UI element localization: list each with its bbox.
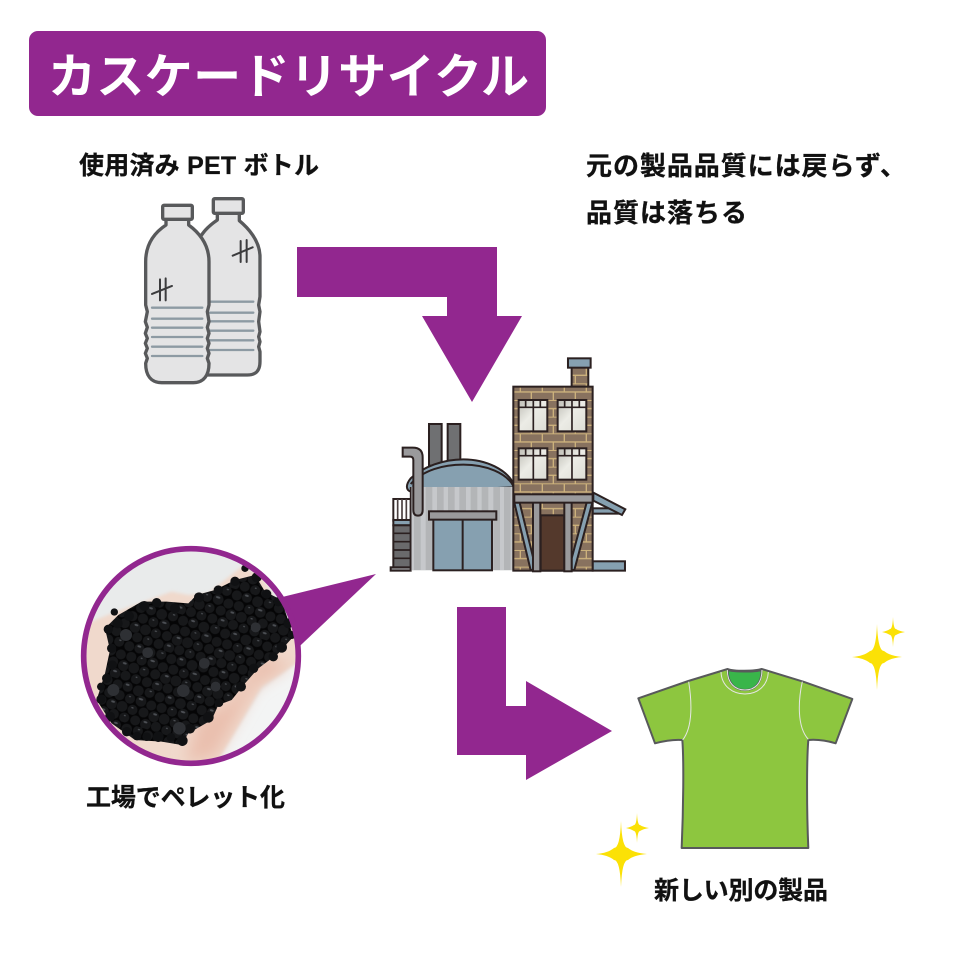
- collar inner: [728, 670, 762, 690]
- arrow: factory to new product: [457, 607, 612, 780]
- note: quality drops: 元の製品品質には戻らず、: [586, 151, 906, 181]
- brick building: [513, 387, 593, 571]
- icon: green T-shirt: [638, 669, 852, 848]
- shirt body: [638, 669, 852, 848]
- label: used PET bottles: 使用済み PET ボトル: [79, 152, 319, 180]
- icon: sparkle top: [852, 617, 905, 690]
- chimney: [568, 358, 591, 387]
- side canopy: [593, 493, 625, 571]
- title: カスケードリサイクル: [48, 51, 529, 104]
- note: quality drops: 品質は落ちる: [586, 198, 747, 228]
- icon: sparkle bottom: [596, 813, 649, 887]
- smokestacks: [429, 424, 460, 466]
- photo border: [84, 549, 298, 763]
- label: pelletized at factory: 工場でペレット化: [86, 784, 285, 812]
- icon: back bottle: [198, 199, 260, 375]
- highlighted pellets: [107, 622, 261, 735]
- windows: [519, 400, 586, 480]
- photo content: [86, 552, 296, 760]
- title: [29, 31, 546, 116]
- blob edge pellets: [96, 565, 296, 746]
- stairs: [391, 499, 411, 571]
- photo: recycled pellets: [80, 546, 302, 766]
- pipe: [403, 448, 423, 516]
- note: quality drops: [586, 151, 906, 228]
- icon: recycling factory: [391, 358, 625, 571]
- shirt seams: [683, 670, 808, 740]
- arrow: bottles to factory: [297, 247, 522, 402]
- label: new different product: 新しい別の製品: [654, 877, 828, 905]
- callout pointer: [270, 574, 376, 660]
- hall door: [429, 511, 496, 570]
- dome hall: [407, 459, 513, 570]
- icon: front bottle: [145, 205, 209, 383]
- icon: PET bottles: [145, 199, 260, 383]
- entrance: [514, 494, 593, 571]
